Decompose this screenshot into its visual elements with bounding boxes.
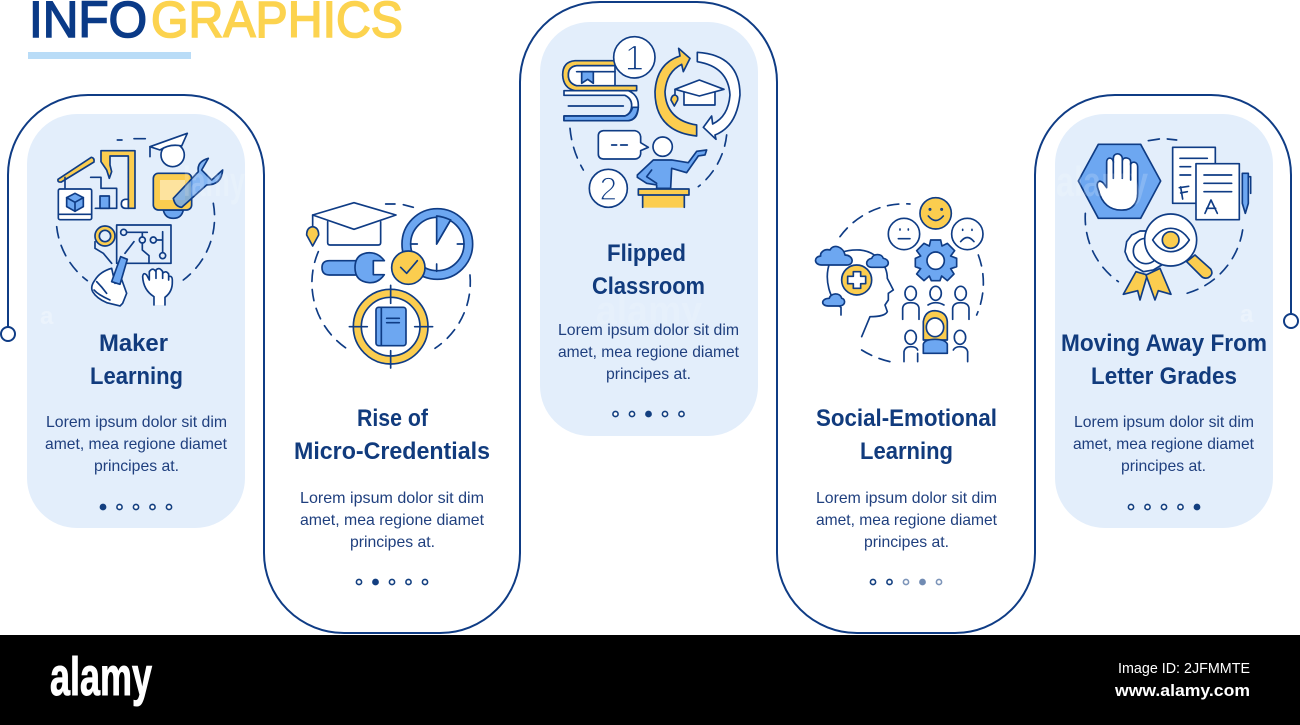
pagination dots [613, 411, 684, 417]
light panel: letter grades [1055, 114, 1273, 528]
heading [592, 240, 705, 300]
icon: flipped classroom: 2 [599, 171, 617, 207]
heading: Social-Emotional [816, 405, 997, 432]
body text: Lorem ipsum dolor sit dim [558, 322, 739, 339]
watermark traces: alamy [596, 289, 703, 333]
pagination dots [1128, 504, 1200, 510]
body text: principes at. [94, 458, 179, 475]
heading: Letter Grades [1091, 363, 1237, 390]
light panel: maker learning [27, 114, 245, 528]
watermark traces: lamy [183, 158, 245, 205]
body text: principes at. [350, 534, 435, 551]
body text: amet, mea regione diamet [558, 344, 740, 361]
body text [300, 490, 485, 551]
icon: flipped classroom [563, 37, 740, 208]
watermark traces: alamy [1056, 158, 1148, 205]
alamy logo: alamy [50, 647, 152, 707]
icon: micro-credentials [307, 203, 473, 368]
card text: micro-credentials [294, 405, 490, 585]
website: www.alamy.com [1114, 681, 1250, 700]
heading: Micro-Credentials [294, 438, 490, 465]
title underline [28, 52, 191, 59]
heading: Learning [860, 438, 953, 465]
heading: Classroom [592, 273, 705, 300]
icon: letter grades [1078, 139, 1251, 300]
body text: principes at. [1121, 458, 1206, 475]
heading [816, 405, 997, 465]
body text: amet, mea regione diamet [300, 512, 485, 529]
heading: Rise of [357, 405, 429, 432]
footer band [0, 635, 1300, 725]
card text: moving away from letter grades [1061, 330, 1267, 510]
watermark traces [40, 158, 1254, 333]
heading [294, 405, 490, 465]
pagination dots [356, 579, 428, 585]
body text: Lorem ipsum dolor sit dim [1074, 414, 1254, 431]
image id: Image ID: 2JFMMTE [1118, 660, 1250, 677]
pagination dots [100, 504, 172, 510]
body text: Lorem ipsum dolor sit dim [46, 414, 227, 431]
body text [1073, 414, 1255, 475]
heading: Flipped [607, 240, 686, 267]
heading: Moving Away From [1061, 330, 1267, 357]
body text: Lorem ipsum dolor sit dim [816, 490, 997, 507]
body text [45, 414, 228, 475]
icon: social-emotional [816, 198, 983, 362]
watermark traces: a [40, 303, 54, 330]
body text: amet, mea regione diamet [1073, 436, 1255, 453]
body text: amet, mea regione diamet [816, 512, 998, 529]
title [29, 0, 403, 48]
body text [558, 322, 740, 383]
body text: principes at. [864, 534, 949, 551]
watermark traces: a [1240, 301, 1254, 328]
body text: principes at. [606, 366, 691, 383]
heading: Learning [90, 363, 183, 390]
body text [816, 490, 998, 551]
icon: maker learning [57, 133, 223, 306]
card text: flipped classroom [558, 240, 740, 417]
icon: flipped classroom: 1 [625, 39, 644, 78]
body text: amet, mea regione diamet [45, 436, 228, 453]
heading [90, 330, 183, 390]
light panel: flipped classroom [540, 22, 758, 436]
card text: maker learning [45, 330, 228, 510]
body text: Lorem ipsum dolor sit dim [300, 490, 484, 507]
pagination dots [870, 579, 942, 585]
heading: Maker [99, 330, 168, 357]
heading [1061, 330, 1267, 390]
card text: social-emotional learning [816, 405, 998, 585]
